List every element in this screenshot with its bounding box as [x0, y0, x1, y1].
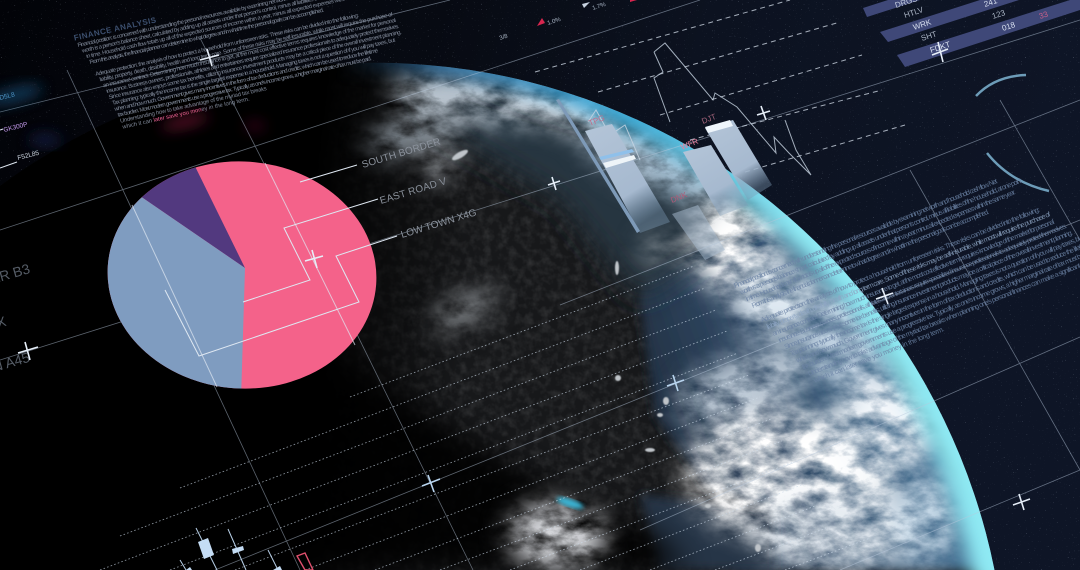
text block: finance analysis — [73, 0, 410, 137]
labels: EAST ROAD V — [379, 176, 448, 207]
text block: right panel: worth is a person's balance sheet, calculated by adding up all assets under that person's control, minus all liabilities of the household, at one point — [738, 178, 1023, 297]
bar chart — [556, 99, 772, 260]
text block: finance analysis: insurance. Business owners, professionals, athletes and entertainers require specialized insurance professionals to adequately protect themselves. — [106, 24, 400, 95]
bar chart: WFR — [679, 137, 700, 152]
text block: finance analysis: Tax planning: typically the income tax is the single largest expense in a household. Managing taxes is not a question of if you will pay taxes, but — [112, 38, 396, 107]
labels: F52L85 — [17, 150, 40, 162]
dotted data lines — [100, 266, 870, 570]
bar chart: DJT — [700, 112, 717, 126]
table top right: 33 — [1038, 9, 1050, 21]
gauge arcs — [976, 75, 1049, 191]
table top right: 123 — [991, 8, 1007, 21]
text block: right panel: Financial position: is concerned with understanding the personal resources available by examining net worth and household cash flow. Net — [733, 178, 999, 290]
cross markers — [18, 42, 1030, 510]
text block: right panel: in time. Household cash flow totals up all of the expected sources of income within a year, minus all expected expenses within the same year. — [745, 189, 1017, 303]
text block: right panel: insurance. Business owners, professionals, athletes and entertainers require specialized insurance professionals to adequately protect themselves. — [778, 223, 1068, 344]
labels: GK300P — [3, 121, 28, 134]
text block: finance analysis: Since insurance also enjoys some tax benefits, utilizing insurance investment products may be a critical piece of the overall investment planning. — [108, 30, 403, 101]
text block: right panel: Since insurance also enjoys some tax benefits, utilizing insurance investment products may be a critical piece of the overall investment planning. — [784, 229, 1074, 351]
text block: finance analysis: FINANCE ANALYSIS — [73, 15, 158, 43]
text block: finance analysis: when and how much. Government gives many incentives in the form of tax deductions and credits, which can be used to reduce the lifetime — [113, 48, 379, 113]
ticker top: 3/8 — [499, 33, 509, 42]
bar chart: TPG — [587, 113, 606, 128]
text block: finance analysis: Adequate protection: the analysis of how to protect a household from unforeseen risks. These risks can be divided into the following: — [95, 13, 360, 78]
ticker top: 1.7% — [592, 2, 607, 12]
text block: right panel: Tax planning: typically the income tax is the single largest expense in a household. Managing taxes is not a question of if you will pay taxes, but — [789, 234, 1080, 358]
text block: finance analysis: From this analysis, the financial planner can determine to what degree and in what time the personal goals can be accomplished. — [89, 8, 325, 66]
text block: right panel: From this analysis, the financial planner can determine to what degree and in what time the personal goals can be accomplished. — [751, 209, 990, 310]
table top right: HTLV — [903, 5, 925, 20]
text block: right panel: which it can later save you money in the long term. — [812, 326, 946, 385]
text block: right panel: an insurance contract. Determining how much insurance to get, at the most cost effective terms requires knowledge of the market for personal — [772, 219, 1056, 338]
table top right: 018 — [1001, 20, 1017, 33]
labels — [0, 91, 478, 375]
atmosphere glow — [351, 62, 994, 570]
table top right: FDKT — [929, 40, 952, 55]
ticker top: 1.0% — [547, 17, 562, 27]
ticker top — [499, 0, 637, 42]
glows — [0, 81, 265, 145]
table top right — [863, 0, 1080, 67]
text block: right panel: Adequate protection: the analysis of how to protect a household from unforeseen risks. These risks can be divided into the following: — [760, 206, 1041, 324]
text block: right panel: liability, property, death, disability, health and long term care. Some of these risks may be self-insurable, while most will require the purchase of — [766, 211, 1052, 331]
bar chart: DNK — [669, 190, 689, 205]
text block: finance analysis: tax burden. Most modern governments use a progressive tax. Typically, as one's income grows, a higher marginal rate of tax must be paid. — [117, 56, 373, 119]
left callout stubs — [0, 129, 17, 168]
dashed lines top right — [535, 0, 905, 172]
pie chart — [108, 161, 376, 389]
text block: right panel — [733, 153, 1080, 399]
text block: finance analysis: which it can later save you money in the long term. — [121, 96, 251, 131]
candlestick chart — [180, 528, 313, 570]
text block: finance analysis: liability, property, death, disability, health and long term care. Some of these risks may be self-insurable, while most will require the purchase of — [99, 12, 394, 83]
labels: LOW TOWN X4G — [400, 207, 478, 241]
table top right: WRK — [912, 17, 933, 32]
table top right: SHT — [920, 29, 938, 43]
text block: finance analysis: Understanding how to take advantage of the myriad tax breaks — [120, 86, 267, 125]
pie callout lines — [132, 163, 397, 387]
text block: finance analysis: an insurance contract. Determining how much insurance to get, at the most cost effective terms requires knowledge of the market for personal — [103, 18, 397, 89]
labels: SOUTH BORDER — [361, 136, 442, 171]
zigzag line chart — [588, 43, 811, 175]
